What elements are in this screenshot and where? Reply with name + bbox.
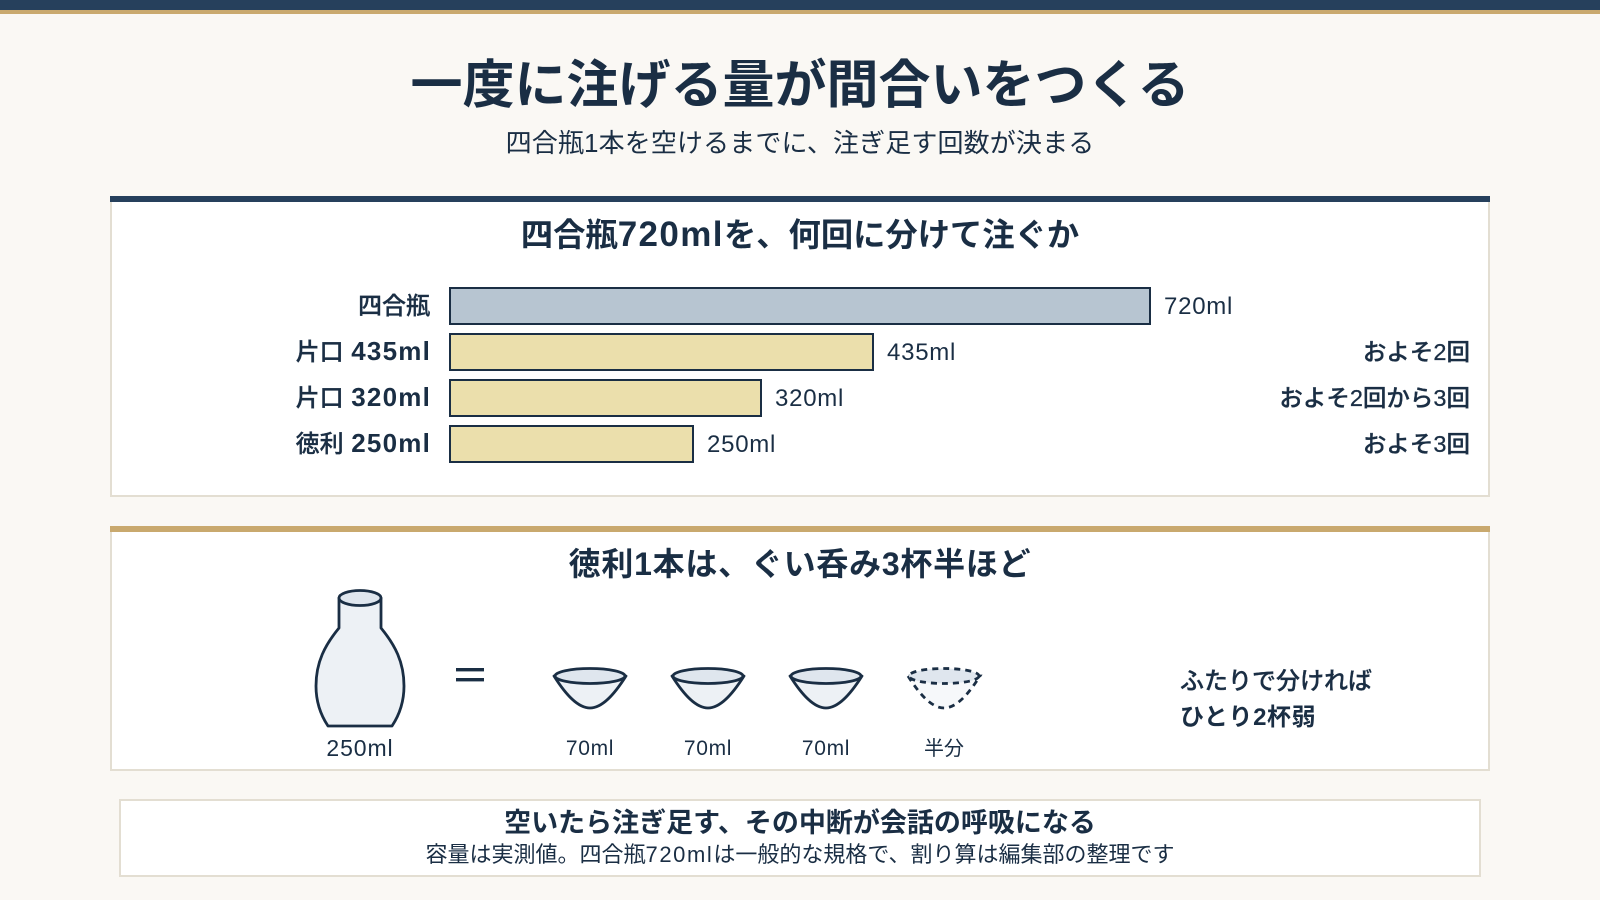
icon: cup 3: 70ml: [802, 737, 850, 760]
row: katakuchi 435ml: 片口 435ml: [296, 336, 431, 366]
icon: cup 2: [672, 668, 744, 760]
icon: tokkuri: [316, 590, 404, 761]
row: katakuchi 435ml: [296, 334, 1470, 370]
text: sharing note: ひとり2杯弱: [1180, 704, 1316, 731]
panel: bottle comparison: [110, 196, 1490, 496]
panel: tokkuri equals cups: [110, 526, 1490, 770]
closing statement: 空いたら注ぎ足す、その中断が会話の呼吸になる: [504, 807, 1096, 838]
icon: half cup: [908, 668, 980, 760]
source note: 容量は実測値。四合瓶720mlは一般的な規格で、割り算は編集部の整理です: [425, 842, 1175, 867]
icon: tokkuri: 250ml: [326, 735, 394, 761]
icon: cup 1: [554, 668, 626, 760]
row: yongobin: 720ml: [1164, 293, 1233, 320]
subtitle: 四合瓶1本を空けるまでに、注ぎ足す回数が決まる: [506, 128, 1094, 158]
row: katakuchi 320ml: 片口 320ml: [296, 382, 431, 412]
row: katakuchi 435ml: およそ2回: [1363, 339, 1470, 365]
bar chart: [296, 288, 1470, 462]
row: tokkuri 250ml: 250ml: [707, 431, 776, 458]
row: katakuchi 320ml: 320ml: [775, 385, 844, 412]
row: katakuchi 320ml: およそ2回から3回: [1279, 385, 1470, 411]
icon: half cup: 半分: [924, 737, 964, 760]
icon: cup 2: 70ml: [684, 737, 732, 760]
row: yongobin: [358, 288, 1233, 324]
row: katakuchi 320ml: [296, 380, 1470, 416]
row: yongobin: 四合瓶: [358, 293, 430, 320]
text: sharing note: ふたりで分ければ: [1180, 668, 1372, 695]
panel: closing note: [120, 800, 1480, 876]
row: tokkuri 250ml: [296, 426, 1470, 462]
icon: equals sign: [456, 668, 484, 681]
heading: three and a half cups: 徳利1本は、ぐい呑み3杯半ほど: [569, 546, 1031, 582]
text: sharing note: [1180, 668, 1372, 731]
row: katakuchi 435ml: 435ml: [887, 339, 956, 366]
icon: cup 1: 70ml: [566, 737, 614, 760]
row: tokkuri 250ml: 徳利 250ml: [296, 428, 431, 458]
title: 一度に注げる量が間合いをつくる: [411, 57, 1189, 115]
icon: cup 3: [790, 668, 862, 760]
row: tokkuri 250ml: およそ3回: [1363, 431, 1470, 457]
heading: how many pours: 四合瓶720mlを、何回に分けて注ぐか: [521, 215, 1079, 254]
